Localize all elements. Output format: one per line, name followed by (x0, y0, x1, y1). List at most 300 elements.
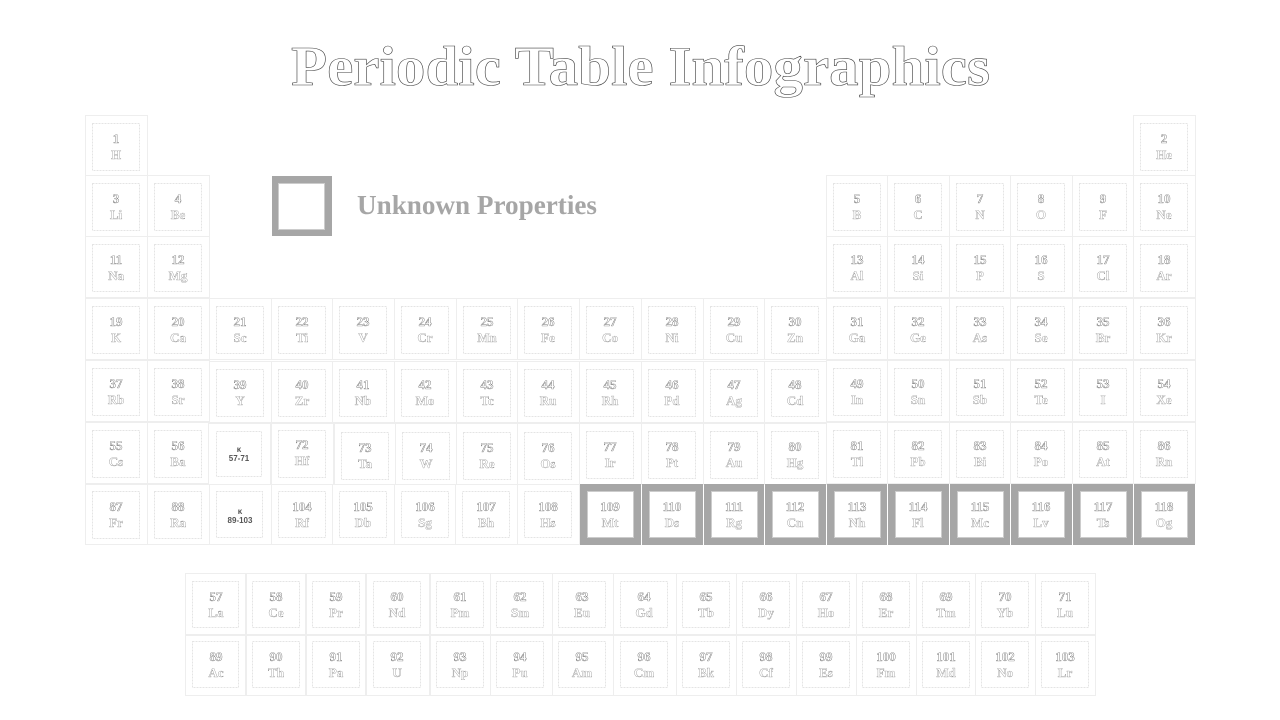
element Th: 90 (270, 649, 282, 664)
element Sn: Sn (911, 392, 926, 407)
element Th: Th (268, 665, 285, 680)
element W: 74 (420, 440, 433, 455)
actinide placeholder: 89-103 (228, 516, 253, 525)
element Sm (490, 574, 552, 634)
lanthanide placeholder: 57-71 (229, 454, 250, 463)
element Es: Es (819, 665, 833, 680)
element U (366, 636, 430, 696)
lanthanide placeholder: κ (237, 445, 242, 454)
element Zr (272, 362, 334, 422)
element In (826, 360, 888, 422)
element Mt unknown: Mt (602, 515, 619, 530)
element Ga (826, 298, 888, 360)
element Mn: Mn (477, 330, 498, 345)
element Gd: Gd (635, 605, 653, 620)
element Tc (456, 362, 518, 422)
element Rf: Rf (295, 515, 310, 530)
element Po (1010, 422, 1072, 484)
element Li: 3 (113, 191, 120, 206)
element Dy (736, 574, 796, 634)
element He: He (1156, 147, 1172, 162)
element Hf: 72 (296, 437, 308, 452)
element Ga: Ga (849, 330, 866, 345)
element Au (704, 424, 766, 484)
element Hg: Hg (787, 455, 804, 470)
element U: 92 (390, 649, 404, 664)
element W (396, 424, 458, 484)
element P (950, 236, 1012, 298)
element I: I (1100, 392, 1106, 407)
element In: In (851, 392, 864, 407)
element Rf: 104 (292, 499, 312, 514)
element Po: Po (1034, 454, 1048, 469)
element Pu: Pu (512, 665, 528, 680)
element Cn unknown: 112 (786, 499, 804, 514)
element Ne: 10 (1158, 191, 1170, 206)
element Ta: Ta (358, 456, 372, 471)
element Rb: Rb (108, 392, 124, 407)
element Bk (676, 636, 736, 696)
element Nb: 41 (356, 377, 370, 392)
element Rb: 37 (110, 376, 123, 391)
element Kr (1134, 298, 1196, 360)
element Hf (272, 424, 334, 484)
element Pr: Pr (329, 605, 343, 620)
element Tc: Tc (480, 393, 494, 408)
element Lv unknown (1011, 484, 1072, 545)
element B (826, 176, 888, 236)
element Pu: 94 (514, 649, 527, 664)
element Ti: Ti (296, 330, 308, 345)
element Zn (764, 298, 826, 360)
element Sg (394, 484, 456, 544)
element Ge (888, 298, 950, 360)
element Cf: 98 (760, 649, 773, 664)
lanthanide and actinide series (186, 574, 1096, 696)
element Rn (1134, 422, 1196, 484)
element Rn: Rn (1156, 454, 1173, 469)
element Sg: 106 (415, 499, 435, 514)
element Sc (210, 298, 272, 360)
actinide placeholder (210, 484, 272, 544)
element Ce: Ce (268, 605, 284, 620)
element Mo: 42 (418, 377, 432, 392)
element Ru: Ru (540, 393, 556, 408)
element K: 19 (110, 314, 123, 329)
element Eu: 63 (576, 589, 589, 604)
element Be (148, 176, 210, 236)
element F (1072, 176, 1134, 236)
element Cl (1072, 236, 1134, 298)
element Si (888, 236, 950, 298)
element Br: Br (1096, 330, 1110, 345)
element Mo: Mo (416, 393, 434, 408)
element P: P (976, 268, 984, 283)
element Nh unknown: 113 (848, 499, 867, 514)
element Ag: 47 (728, 377, 741, 392)
element Nh unknown (827, 484, 887, 545)
element Ce: 58 (270, 589, 283, 604)
element Cd (764, 362, 826, 422)
element Ca: 20 (172, 314, 184, 329)
element O: 8 (1038, 191, 1045, 206)
element Ho: Ho (818, 605, 834, 620)
element Ne: Ne (1156, 207, 1172, 222)
element H: 1 (113, 131, 119, 146)
legend swatch (272, 176, 332, 236)
element As (950, 298, 1012, 360)
element Pt (642, 424, 704, 484)
element Fm: Fm (877, 665, 896, 680)
element As: As (973, 330, 987, 345)
element Bi: Bi (974, 454, 987, 469)
element Mc unknown: 115 (971, 499, 990, 514)
element Mg (148, 236, 210, 298)
element Rb (86, 360, 148, 422)
element Er (856, 574, 916, 634)
element Zr: 40 (296, 377, 308, 392)
element Db: Db (355, 515, 371, 530)
legend: unknown properties (272, 176, 597, 236)
element Ar: 18 (1158, 252, 1171, 267)
element Te: 52 (1034, 376, 1048, 391)
element Cr (394, 298, 456, 360)
element Th (246, 636, 306, 696)
element Lr: Lr (1058, 665, 1072, 680)
element Rh: Rh (602, 393, 619, 408)
element Pr: 59 (330, 589, 343, 604)
element Ac: 89 (210, 649, 223, 664)
element Tm: Tm (936, 605, 956, 620)
element Pd (642, 362, 704, 422)
element Ca (148, 298, 210, 360)
element Ne (1134, 176, 1196, 236)
element Sn (888, 360, 950, 422)
element Cd: 48 (788, 377, 802, 392)
element Yb: 70 (998, 589, 1012, 604)
element Rn: 86 (1158, 438, 1171, 453)
element Cr: Cr (417, 330, 433, 345)
element Sr: 38 (172, 376, 185, 391)
element Ta (334, 424, 396, 484)
element O (1010, 176, 1072, 236)
element Bh: 107 (476, 499, 496, 514)
element Ds unknown: 110 (663, 499, 681, 514)
element La: La (208, 605, 224, 620)
element Te: Te (1034, 392, 1048, 407)
element Lv unknown: Lv (1033, 515, 1049, 530)
element Ge: 32 (912, 314, 924, 329)
element Rf (272, 484, 334, 544)
element Ar: Ar (1156, 268, 1172, 283)
element Lv unknown: 116 (1032, 499, 1051, 514)
element Li (86, 176, 148, 236)
element Cm: 96 (638, 649, 651, 664)
element Eu: Eu (574, 605, 590, 620)
element Ts unknown (1073, 484, 1133, 545)
element Ni: 28 (666, 314, 679, 329)
element Rg unknown: Rg (726, 515, 742, 530)
element Ir (580, 424, 642, 484)
element Ts unknown: 117 (1094, 499, 1113, 514)
element Sc: Sc (234, 330, 247, 345)
element Cu (704, 298, 766, 360)
element Ni (642, 298, 704, 360)
element Am: 95 (576, 649, 589, 664)
element I: 53 (1096, 376, 1110, 391)
element Bh: Bh (478, 515, 495, 530)
element U: U (392, 665, 402, 680)
element Au: 79 (728, 439, 741, 454)
element Po: 84 (1034, 438, 1048, 453)
element Ts unknown: Ts (1097, 515, 1109, 530)
element Md (916, 636, 976, 696)
element La: 57 (210, 589, 223, 604)
element Cs: Cs (109, 454, 123, 469)
element Zn: 30 (788, 314, 802, 329)
element Nb (332, 362, 394, 422)
element Al: 13 (850, 252, 864, 267)
element Si: Si (913, 268, 924, 283)
element Pm (430, 574, 490, 634)
element Mt unknown (580, 484, 641, 545)
element Lu (1036, 574, 1096, 634)
element Ac (186, 636, 246, 696)
element Fm (856, 636, 916, 696)
element At: 85 (1096, 438, 1110, 453)
element Ar (1134, 236, 1196, 298)
main periodic table (86, 116, 1196, 545)
element Fl unknown: Fl (912, 515, 924, 530)
element Pt: Pt (666, 455, 679, 470)
element He (1134, 116, 1196, 176)
element N: N (975, 207, 985, 222)
element Sg: Sg (418, 515, 432, 530)
element At (1072, 422, 1134, 484)
element Tb: Tb (698, 605, 714, 620)
element Re: Re (479, 456, 495, 471)
element Na (86, 236, 148, 298)
element Ta: 73 (358, 440, 372, 455)
element Fe (518, 298, 580, 360)
element S: S (1037, 268, 1045, 283)
element Og unknown: 118 (1155, 499, 1174, 514)
element Al: Al (850, 268, 864, 283)
legend label: Unknown Properties (357, 190, 597, 220)
element Br (1072, 298, 1134, 360)
element Hs (518, 484, 580, 544)
element Li: Li (110, 207, 123, 222)
element Db (332, 484, 394, 544)
element V: 23 (356, 314, 370, 329)
element H (86, 116, 148, 176)
element Ge: Ge (910, 330, 926, 345)
element Si: 14 (912, 252, 925, 267)
element Fr: Fr (109, 515, 123, 530)
element Te (1010, 360, 1072, 422)
element As: 33 (974, 314, 987, 329)
element Cs (86, 422, 148, 484)
element Cu: 29 (728, 314, 741, 329)
element Mg: Mg (169, 268, 188, 283)
element C (888, 176, 950, 236)
element Ir: Ir (605, 455, 616, 470)
element Fr (86, 484, 148, 544)
element Og unknown (1134, 484, 1195, 545)
element N: 7 (977, 191, 984, 206)
element V (332, 298, 394, 360)
element Am (552, 636, 614, 696)
element Fl unknown (888, 484, 949, 545)
title: Periodic Table Infographics (291, 36, 990, 98)
element Dy: Dy (758, 605, 774, 620)
element Sb (950, 360, 1012, 422)
element Al (826, 236, 888, 298)
element Fe: 26 (542, 314, 555, 329)
element Hg: 80 (788, 439, 802, 454)
element Pu (490, 636, 552, 696)
element Ds unknown (642, 484, 703, 545)
element He: 2 (1161, 131, 1167, 146)
element Zn: Zn (787, 330, 804, 345)
element Kr: Kr (1156, 330, 1172, 345)
element Ba: Ba (170, 454, 186, 469)
element Se (1010, 298, 1072, 360)
element Ru: 44 (542, 377, 555, 392)
element Cm (614, 636, 676, 696)
element Sn: 50 (912, 376, 924, 391)
element Hf: Hf (295, 453, 310, 468)
element Xe: Xe (1156, 392, 1172, 407)
element Na: Na (108, 268, 124, 283)
element Cn unknown (765, 484, 826, 545)
element At: At (1096, 454, 1111, 469)
element Ba (148, 422, 210, 484)
element P: 15 (974, 252, 987, 267)
element Ag (704, 362, 766, 422)
element F: F (1099, 207, 1107, 222)
element Dy: 66 (760, 589, 773, 604)
element Mo (394, 362, 456, 422)
element Pm: 61 (454, 589, 466, 604)
element Tb: 65 (700, 589, 713, 604)
element In: 49 (850, 376, 864, 391)
element Nd: 60 (390, 589, 404, 604)
element Gd: 64 (638, 589, 651, 604)
element S (1010, 236, 1072, 298)
element Am: Am (572, 665, 592, 680)
element Pd: Pd (664, 393, 680, 408)
element Pb (888, 422, 950, 484)
element Se: 34 (1034, 314, 1048, 329)
element Np (430, 636, 490, 696)
element No (976, 636, 1036, 696)
element I (1072, 360, 1134, 422)
element Ca: Ca (170, 330, 186, 345)
element No: No (997, 665, 1013, 680)
element Ho (796, 574, 856, 634)
element Ti: 22 (296, 314, 308, 329)
element W: W (420, 456, 432, 471)
element Ra: 88 (172, 499, 185, 514)
element Hs: 108 (538, 499, 558, 514)
element Na: 11 (110, 252, 122, 267)
element Pa (306, 636, 366, 696)
element Xe (1134, 360, 1196, 422)
element Be: Be (171, 207, 185, 222)
element Tl: Tl (851, 454, 864, 469)
element B: 5 (854, 191, 861, 206)
element Pa: 91 (330, 649, 342, 664)
element Os (518, 424, 580, 484)
element No: 102 (995, 649, 1015, 664)
element Cr: 24 (418, 314, 432, 329)
element Pb: Pb (910, 454, 926, 469)
element Lr: 103 (1055, 649, 1075, 664)
element Fe: Fe (541, 330, 555, 345)
element Lu: 71 (1058, 589, 1072, 604)
element Kr: 36 (1158, 314, 1171, 329)
element Ce (246, 574, 306, 634)
element Hg (764, 424, 826, 484)
element Rh (580, 362, 642, 422)
element Np: Np (452, 665, 468, 680)
element Sb: Sb (973, 392, 987, 407)
element Np: 93 (454, 649, 467, 664)
element Co: 27 (604, 314, 617, 329)
element Lr (1036, 636, 1096, 696)
element Ra: Ra (170, 515, 186, 530)
element Gd (614, 574, 676, 634)
actinide placeholder: κ (238, 507, 243, 516)
element H: H (111, 147, 121, 162)
element Lu: Lu (1057, 605, 1073, 620)
element O: O (1036, 207, 1046, 222)
element Pa: Pa (329, 665, 344, 680)
element Nd: Nd (389, 605, 406, 620)
element Eu (552, 574, 614, 634)
element Fl unknown: 114 (909, 499, 928, 514)
element Ds unknown: Ds (665, 515, 679, 530)
element Bk: 97 (700, 649, 713, 664)
element Cm: Cm (634, 665, 654, 680)
element Nd (366, 574, 430, 634)
element F: 9 (1100, 191, 1107, 206)
element Nb: Nb (355, 393, 371, 408)
element Er: Er (879, 605, 893, 620)
element Au: Au (726, 455, 742, 470)
element Xe: 54 (1158, 376, 1171, 391)
element Co: Co (602, 330, 618, 345)
element Cf: Cf (759, 665, 774, 680)
element Re (456, 424, 518, 484)
element Tm (916, 574, 976, 634)
element Bh (456, 484, 518, 544)
element B: B (853, 207, 862, 222)
element Cl: Cl (1096, 268, 1110, 283)
element Tm: 69 (940, 589, 953, 604)
element Pm: Pm (451, 605, 470, 620)
element Tc: 43 (480, 377, 494, 392)
element Pb: 82 (912, 438, 924, 453)
element Es: 99 (820, 649, 833, 664)
element Mc unknown: Mc (971, 515, 989, 530)
element Y: Y (235, 393, 245, 408)
element N (950, 176, 1012, 236)
element Ni: Ni (666, 330, 679, 345)
element Er: 68 (880, 589, 893, 604)
element Tb (676, 574, 736, 634)
